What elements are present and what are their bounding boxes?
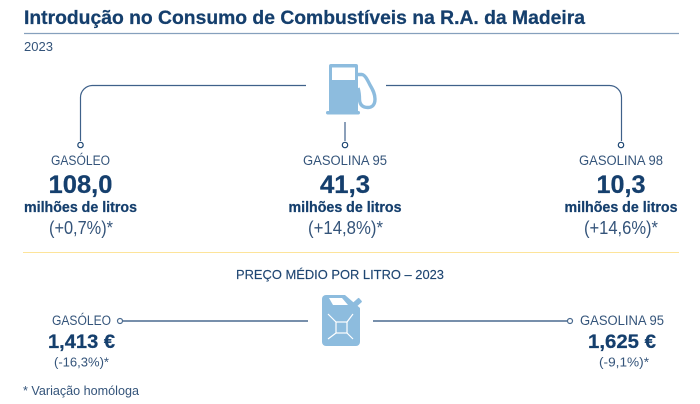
stat: gasolina 98 consumption: [564, 153, 678, 238]
stat: gasóleo consumption: (+0,7%)*: [49, 218, 113, 238]
stat: gasóleo consumption: 108,0: [48, 171, 112, 199]
stat: gasóleo price: GASÓLEO: [52, 313, 111, 328]
footnote: * Variação homóloga: [23, 384, 139, 398]
stat: gasolina 95 consumption: (+14,8%)*: [308, 218, 383, 238]
connectors: consumption: [78, 85, 624, 148]
stat: gasolina 95 price: (-9,1%)*: [599, 356, 649, 370]
stat: gasóleo consumption: [24, 153, 137, 238]
stat: gasolina 98 consumption: milhões de litros: [564, 200, 678, 216]
stat: gasolina 95 consumption: [288, 153, 402, 238]
stat: gasóleo consumption: GASÓLEO: [51, 153, 110, 168]
stat: gasolina 95 price: 1,625 €: [588, 332, 656, 353]
stat: gasóleo price: 1,413 €: [48, 332, 115, 353]
stat: gasolina 95 price: GASOLINA 95: [580, 313, 664, 328]
stat: gasóleo price: [48, 313, 115, 370]
icon: jerry can: [322, 295, 362, 346]
stat: gasolina 98 consumption: GASOLINA 98: [579, 153, 663, 168]
price heading: PREÇO MÉDIO POR LITRO – 2023: [236, 267, 444, 282]
connectors: price: [118, 318, 572, 324]
year: 2023: [24, 40, 53, 54]
stat: gasóleo consumption: milhões de litros: [24, 200, 137, 216]
stat: gasolina 95 consumption: 41,3: [320, 171, 370, 199]
title: Introdução no Consumo de Combustíveis na R.A. da Madeira: [24, 7, 585, 29]
stat: gasóleo price: (-16,3%)*: [54, 356, 109, 370]
stat: gasolina 95 consumption: GASOLINA 95: [303, 153, 387, 168]
stat: gasolina 95 price: [580, 313, 664, 370]
stat: gasolina 95 consumption: milhões de litros: [288, 200, 402, 216]
stat: gasolina 98 consumption: (+14,6%)*: [584, 218, 658, 238]
icon: fuel pump: [326, 64, 375, 114]
stat: gasolina 98 consumption: 10,3: [596, 171, 646, 199]
